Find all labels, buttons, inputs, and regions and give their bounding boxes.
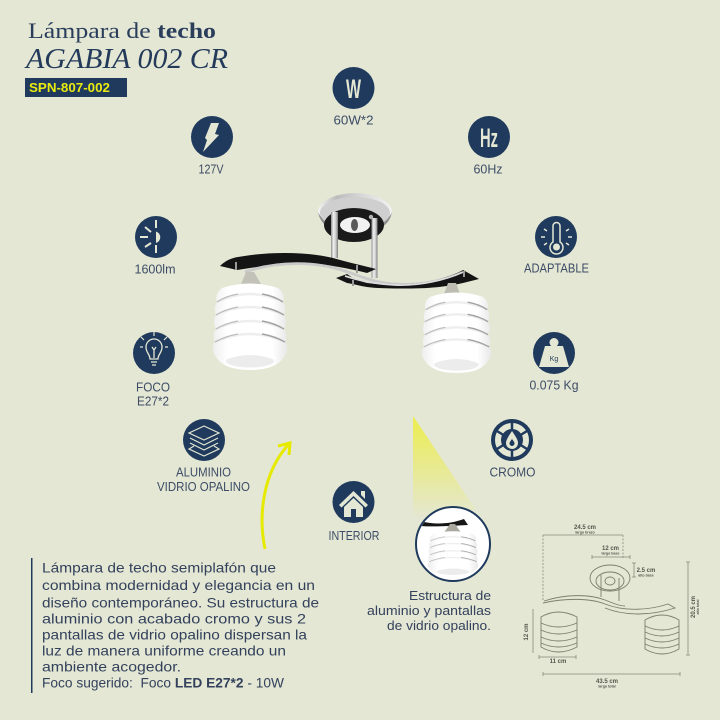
spec: use [328,481,380,543]
spec: voltage [191,116,233,176]
spec: voltage: 127V [198,162,224,176]
dimension labels: 12 cm [602,546,619,552]
dimension labels: 20.5 cm [691,596,697,618]
detail caption: aluminio y pantallas [367,603,492,618]
spec: materials: VIDRIO OPALINO [157,480,250,494]
spec: use: INTERIOR [328,529,380,543]
spec: wattage: 60W*2 [334,114,374,128]
lamp outline [541,565,679,654]
detail caption: Estructura de [409,588,491,603]
spec: temperature [524,216,589,276]
description: luz de manera uniforme creando un [42,642,286,658]
description: pantallas de vidrio opalino dispersan la [42,626,307,642]
left shade [213,272,287,370]
dimension labels: alto base [638,574,654,578]
spec: weight: 0.075 Kg [530,378,579,392]
detail caption [367,588,492,633]
canopy [318,193,392,242]
right shade [422,283,491,373]
spec: weight: Kg [550,356,558,363]
lamp photo [213,193,491,373]
spec: finish [490,419,536,480]
description: Foco sugerido: Foco LED E27*2 - 10W [42,674,285,690]
detail caption: de vidrio opalino. [387,618,491,633]
spec: frequency: 60Hz [474,162,502,176]
detail circle [416,507,490,581]
dimension labels: 24.5 cm [574,525,596,531]
spec: luminous flux: 1600lm [134,262,176,276]
spec: temperature: ADAPTABLE [524,262,589,276]
dimension labels: 2.5 cm [637,568,655,574]
dimension labels [524,525,700,688]
dimension lines [533,535,690,676]
description: ambiente acogedor. [42,658,181,674]
title [24,18,228,75]
spec: bulb type: FOCO [136,380,170,394]
arrow [262,443,290,549]
dimension labels: largo total [598,684,616,688]
spotlight beam [413,416,476,520]
spec: luminous flux [134,216,177,276]
dimension labels: 11 cm [550,659,566,665]
dimension diagram [524,525,700,688]
dimension labels: largo base [602,552,619,556]
spec: materials [157,419,250,494]
spec: wattage [332,67,374,128]
spec: bulb type: E27*2 [137,394,169,408]
badge: product code: SPN-807-002 [29,81,110,95]
arms [220,253,479,289]
support rods [331,212,378,278]
dimension labels: 12 cm [524,623,530,641]
title: Lámpara de techo [28,18,216,43]
description: diseño contemporáneo. Su estructura de [42,594,319,610]
spec: materials: ALUMINIO [176,466,231,480]
description: aluminio con acabado cromo y sus 2 [42,610,306,626]
dimension labels: largo brazo [575,530,595,534]
spec: wattage: W [346,74,361,104]
description: Lámpara de techo semiplafón que [42,560,276,576]
title: AGABIA 002 CR [24,43,228,75]
dimension labels: 43.5 cm [596,679,618,685]
spec: frequency: Hz [480,123,498,153]
dimension labels: alto total [696,600,700,614]
spec: finish: CROMO [490,466,536,480]
badge: product code [25,78,127,97]
description [31,558,319,693]
spec: frequency [468,116,510,176]
spec: bulb type [133,332,175,408]
description: combina modernidad y elegancia en un [42,577,315,593]
spec: weight [530,332,579,392]
